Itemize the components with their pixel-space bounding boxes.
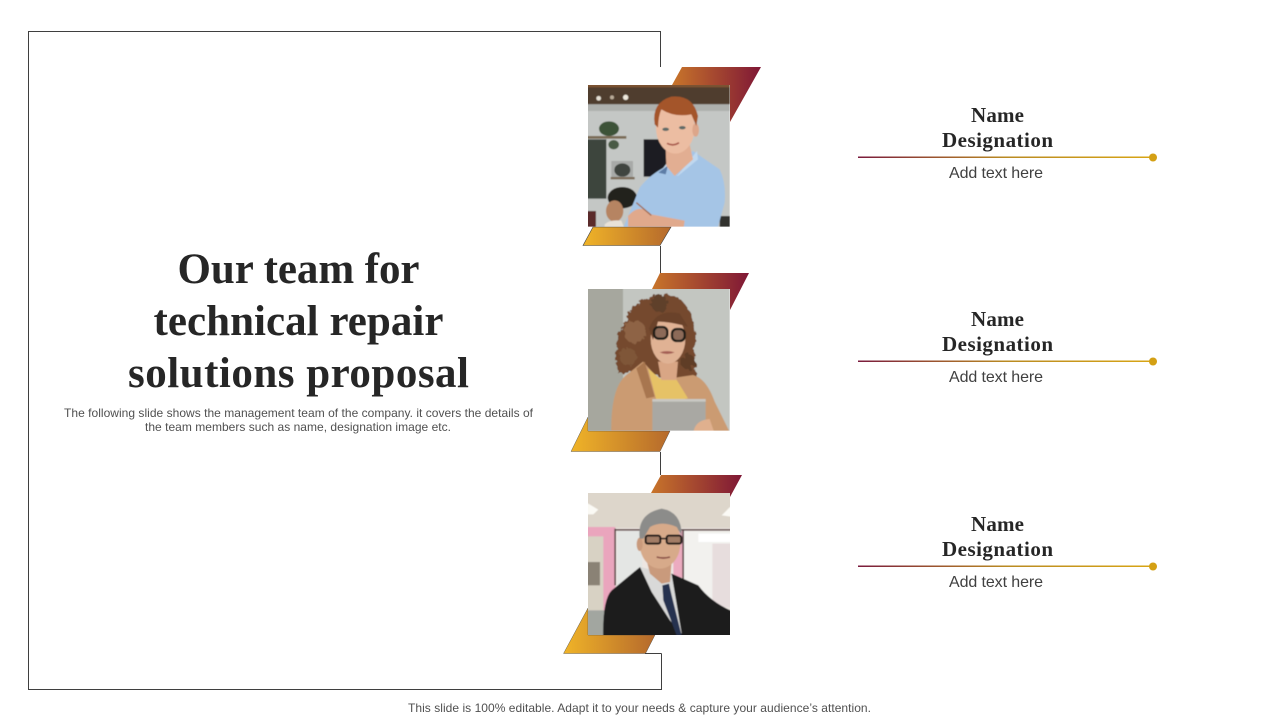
description text xyxy=(64,406,534,434)
title xyxy=(128,246,469,397)
name and designation 1 xyxy=(942,103,1053,152)
team member 2 graphic xyxy=(571,273,749,452)
name and designation 3 xyxy=(942,512,1053,561)
title: Our team for xyxy=(178,246,420,293)
marker dot 2 xyxy=(1149,358,1157,366)
team entry 1 xyxy=(858,103,1157,182)
body text 3: Add text here xyxy=(949,574,1043,591)
body text 2: Add text here xyxy=(949,369,1043,386)
team entry 2 xyxy=(858,307,1157,386)
connector line 1 xyxy=(858,156,1153,158)
footer note: This slide is 100% editable. Adapt it to your needs & capture your audience’s attention. xyxy=(408,701,871,715)
marker dot 1 xyxy=(1149,154,1157,162)
outline frame xyxy=(28,32,662,690)
name and designation 2: Name xyxy=(971,307,1024,331)
team entry 3 xyxy=(858,512,1157,591)
photo: man in blue shirt xyxy=(588,85,730,227)
accent shape: bottom 2 xyxy=(571,417,670,452)
accent shape: top 3 xyxy=(651,475,742,497)
description text: the team members such as name, designation image etc. xyxy=(145,420,451,434)
name and designation 1: Designation xyxy=(942,128,1053,152)
description text: The following slide shows the management team of the company. it covers the details of xyxy=(64,406,534,420)
accent shape: top 1 xyxy=(672,67,761,122)
connector line 3 xyxy=(858,566,1153,567)
team member 1 graphic xyxy=(580,67,761,246)
photo: woman with glasses and laptop xyxy=(588,289,730,431)
name and designation 1: Name xyxy=(971,103,1024,127)
frame segment: bottom 3 xyxy=(645,652,662,654)
name and designation 3: Designation xyxy=(942,537,1053,561)
body text 1: Add text here xyxy=(949,165,1043,182)
name and designation 3: Name xyxy=(971,512,1024,536)
accent shape: bottom 3 xyxy=(564,608,655,654)
name and designation 2: Designation xyxy=(942,332,1053,356)
team member 3 graphic xyxy=(564,475,742,654)
connector line 2 xyxy=(858,360,1153,362)
photo: man in dark suit xyxy=(588,493,730,635)
accent shape: top 2 xyxy=(652,273,749,310)
marker dot 3 xyxy=(1149,562,1157,570)
name and designation 2 xyxy=(942,307,1053,356)
title: technical repair xyxy=(154,298,444,345)
title: solutions proposal xyxy=(128,350,469,397)
accent shape: bottom 1 xyxy=(583,227,671,246)
